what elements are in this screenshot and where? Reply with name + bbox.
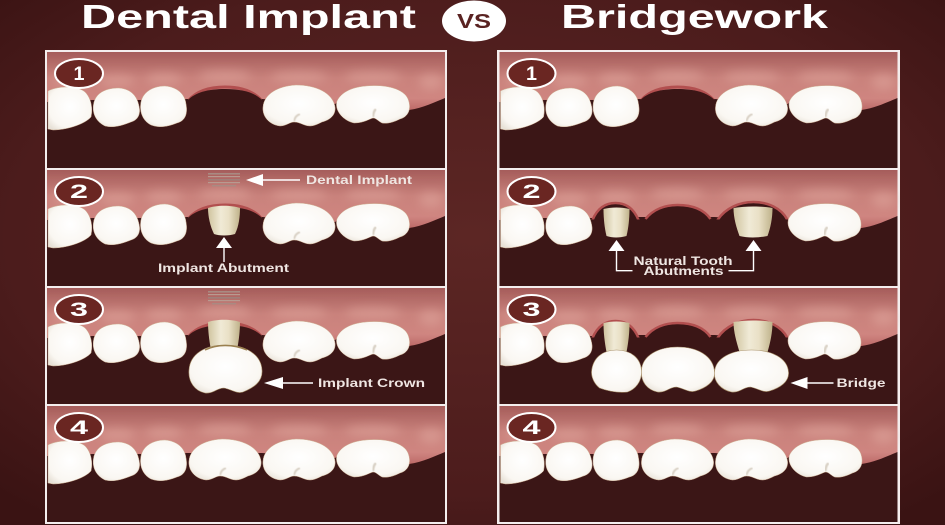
panel: bridge step 1 xyxy=(500,52,898,168)
panel: implant step 1: 1 xyxy=(74,64,85,85)
panel: implant step 3: 3 xyxy=(70,300,88,321)
vs badge: VS xyxy=(457,11,491,33)
panel: implant step 2: 2 xyxy=(70,182,88,203)
panel: implant step 3 xyxy=(47,288,445,404)
panel: implant step 1 xyxy=(47,52,445,168)
panel: bridge step 2: Natural Tooth xyxy=(634,256,732,268)
panel: bridge step 4 xyxy=(500,406,898,522)
panel: bridge step 3: Bridge xyxy=(836,378,886,390)
panel: bridge step 3 xyxy=(500,288,898,404)
panel: bridge step 2: 2 xyxy=(522,182,540,203)
panel: implant step 4: 4 xyxy=(70,418,89,439)
column: Dental Implant xyxy=(45,50,447,524)
panel: implant step 2: Dental Implant xyxy=(306,175,412,187)
panel: bridge step 2: Abutments xyxy=(644,266,724,278)
panel: implant step 3: Implant Crown xyxy=(318,378,425,390)
panel: implant step 4 xyxy=(47,406,445,522)
panel: implant step 2: Implant Abutment xyxy=(158,263,289,275)
panel: bridge step 3: 3 xyxy=(522,300,540,321)
panel: bridge step 1: 1 xyxy=(526,64,537,85)
panel: bridge step 2 xyxy=(500,170,898,286)
panel: bridge step 4: 4 xyxy=(522,418,541,439)
panel: implant step 2 xyxy=(47,170,445,286)
vs badge xyxy=(442,0,506,42)
column: Bridgework xyxy=(497,50,900,524)
